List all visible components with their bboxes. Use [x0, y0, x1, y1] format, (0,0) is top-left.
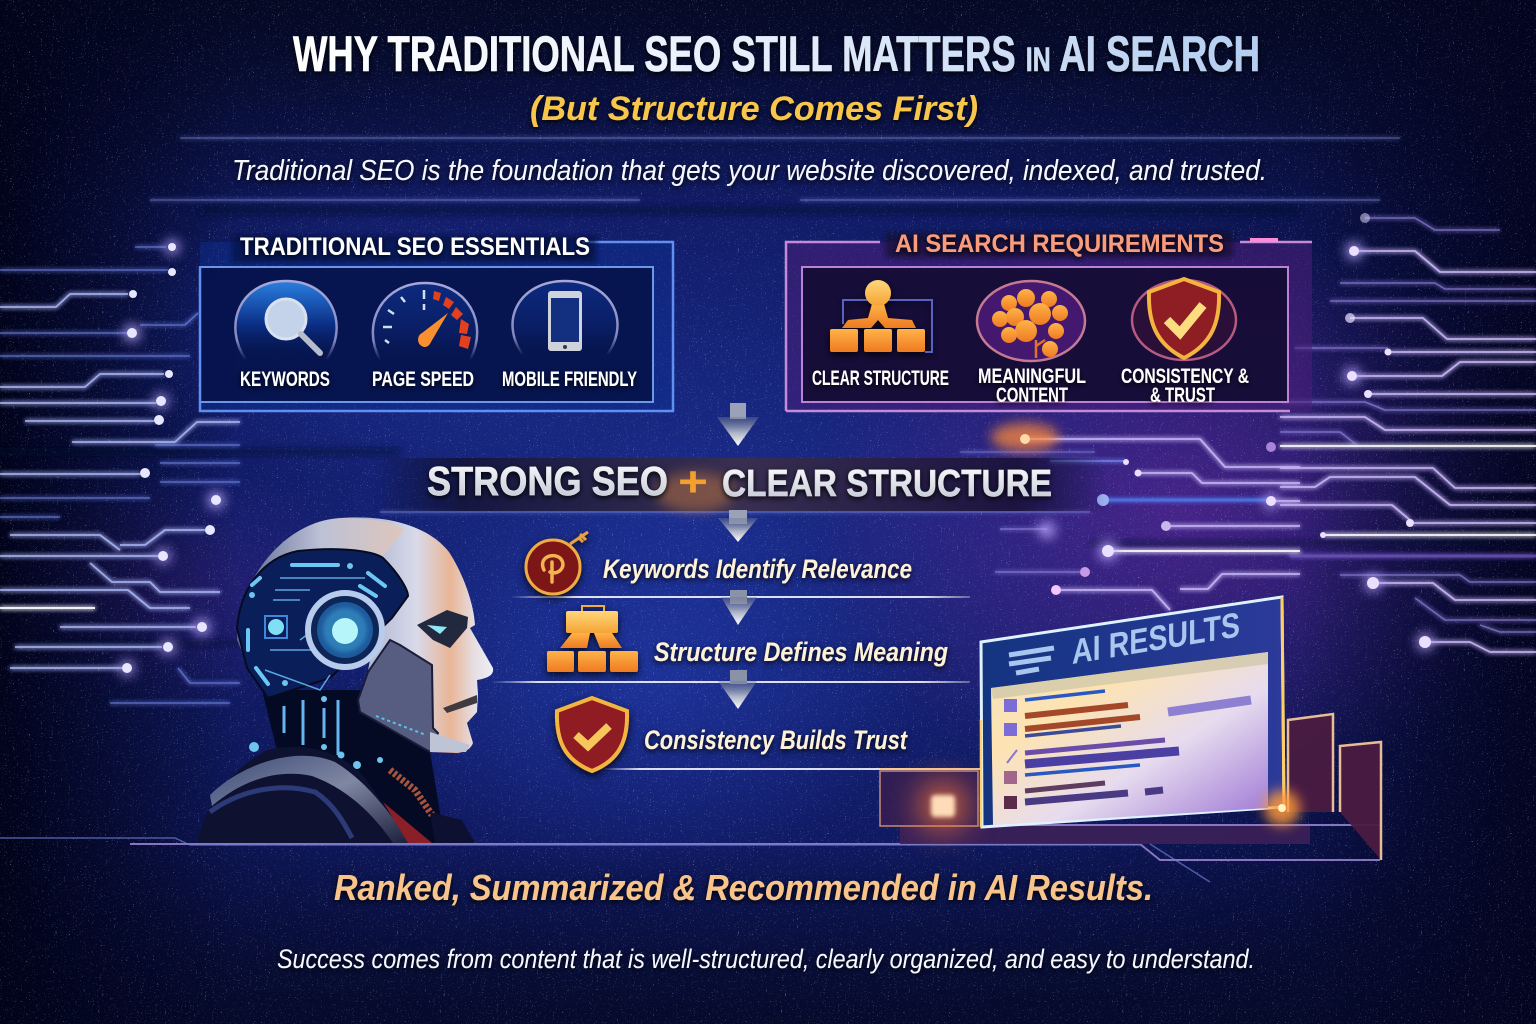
label: meaningful content: MEANINGFUL: [978, 365, 1086, 388]
icon: mobile phone: [513, 281, 617, 355]
illustration: AI results screen: [130, 597, 1381, 860]
header icon: [1009, 648, 1054, 673]
arrow: formula to steps: [718, 510, 758, 542]
robot helmet: [237, 518, 404, 670]
title: WHY TRADITIONAL SEO STILL MATTERS IN AI SEARCH: [293, 26, 1260, 82]
lens flare: [1264, 790, 1300, 826]
label: consistency and trust: & TRUST: [1150, 384, 1215, 407]
label: consistency and trust: [1121, 365, 1249, 407]
label: clear structure: CLEAR STRUCTURE: [812, 367, 949, 390]
panel: traditional SEO essentials: [200, 233, 673, 411]
robot circuit skull: [237, 549, 408, 698]
screen frame: [981, 597, 1284, 827]
robot eye: [417, 610, 468, 648]
robot neck: [262, 690, 445, 843]
arrow: step two to three: [718, 670, 757, 709]
robot shoulders: [197, 747, 410, 843]
label: keywords: KEYWORDS: [240, 368, 330, 391]
label: page speed: PAGE SPEED: [372, 368, 474, 391]
icon: target: [526, 532, 588, 594]
decorative circuit lines: [0, 138, 1536, 703]
text: clear structure: CLEAR STRUCTURE: [722, 463, 1052, 505]
result sheet: [991, 652, 1268, 825]
subtitle: (But Structure Comes First): [530, 90, 978, 128]
banner: strong SEO plus clear structure: [375, 458, 1105, 512]
icon: page speed gauge: [373, 283, 477, 360]
label: meaningful content: CONTENT: [996, 384, 1068, 407]
closing sentence: Success comes from content that is well-structured, clearly organized, and easy to understand.: [277, 944, 1255, 974]
icon: keywords magnifier: [235, 281, 337, 360]
decorative glowing circuit nodes: [120, 213, 1433, 675]
panel: AI search requirements: [786, 230, 1312, 411]
robot cables: [390, 770, 432, 815]
text: keywords identify relevance: Keywords Identify Relevance: [603, 554, 912, 584]
screen heading: AI RESULTS: [1072, 605, 1240, 672]
arrow: step one to two: [721, 590, 757, 625]
step: keywords identify relevance: [526, 532, 912, 594]
robot ear lens: [308, 593, 382, 667]
result rows: [1004, 691, 1251, 809]
result statement: Ranked, Summarized & Recommended in AI Results.: [334, 867, 1153, 908]
side towers: [1288, 714, 1381, 860]
text: consistency builds trust: Consistency Builds Trust: [644, 725, 908, 755]
icon: meaningful content brain: [977, 281, 1085, 361]
label: mobile friendly: MOBILE FRIENDLY: [502, 368, 637, 391]
left console: [880, 771, 978, 826]
base platform: [130, 825, 1380, 860]
text: structure defines meaning: Structure Defines Meaning: [654, 637, 948, 667]
robot face: [340, 517, 493, 753]
heading: AI search requirements: AI SEARCH REQUIREMENTS: [895, 230, 1224, 258]
step: consistency builds trust: [557, 698, 908, 771]
robot mouth: [443, 695, 477, 713]
arrow: panels to formula: [717, 403, 759, 446]
robot jaw plate: [358, 640, 438, 752]
decorative base line: [0, 838, 1210, 882]
icon: clear structure hierarchy: [830, 280, 932, 352]
intro sentence: Traditional SEO is the foundation that gets your website discovered, indexed, and trusted.: [232, 155, 1267, 187]
illustration: robot head in profile: [197, 517, 493, 843]
symbol: plus: +: [678, 458, 708, 505]
icon: hierarchy: [547, 606, 638, 672]
heading: traditional SEO essentials: TRADITIONAL SEO ESSENTIALS: [240, 233, 590, 261]
divider lines between steps: [490, 596, 1000, 770]
step: structure defines meaning: [547, 606, 948, 672]
icon: consistency shield: [1132, 279, 1236, 360]
icon: shield: [557, 698, 627, 771]
label: meaningful content: [978, 365, 1086, 407]
label: consistency and trust: CONSISTENCY &: [1121, 365, 1249, 388]
text: strong SEO: STRONG SEO: [427, 458, 668, 504]
